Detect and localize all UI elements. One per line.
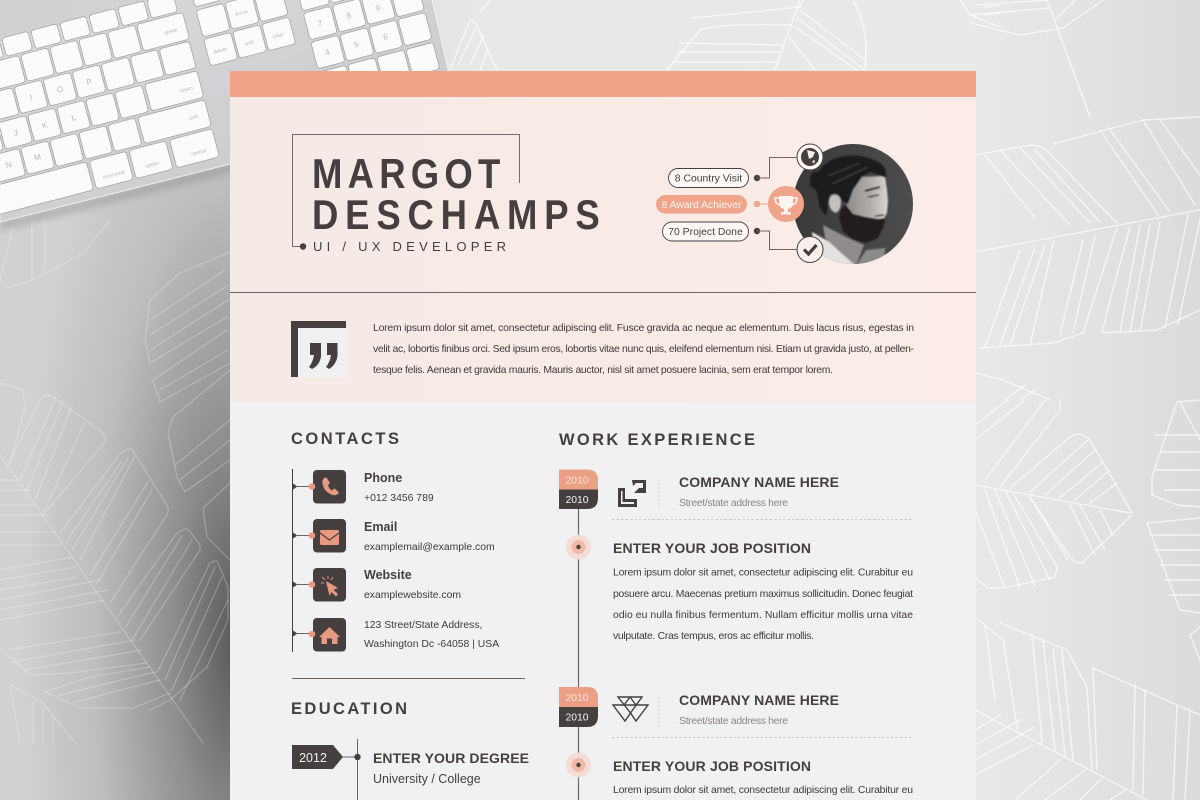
brow and eye [865, 187, 880, 191]
background: right leaf pattern [970, 0, 1200, 800]
timeline node 2 [566, 752, 591, 778]
year tags: job 1: 2010 [565, 476, 589, 486]
icon: company logo triangles [613, 697, 648, 721]
heading: contacts: CONTACTS [291, 430, 399, 448]
keyboard keys: delete [164, 27, 179, 37]
stat: 8 award achiever: 8 Award Achiever [661, 200, 742, 211]
job position 1 [613, 540, 913, 642]
title frame [292, 134, 520, 250]
keyboard keys: 8 [346, 11, 353, 21]
year tags: job 2 [559, 687, 598, 727]
keyboard keys: page [273, 31, 285, 40]
contact: address: 123 Street/State Address, [364, 620, 482, 631]
summary paragraph: velit ac, lobortis finibus orci. Sed ipsum eros, lobortis vitae nunc quis, eleifend elementum nisi. Etiam ut gravida justo, at pellen- [373, 344, 914, 355]
stat: 70 project done: 70 Project Done [668, 227, 743, 238]
contact: address [309, 618, 499, 652]
icon: trophy [768, 186, 804, 222]
keyboard keys: control [191, 148, 207, 158]
summary paragraph: Lorem ipsum dolor sit amet, consectetur adipiscing elit. Fusce gravida ac neque ac elementum. Duis lacus risus, egestas in [373, 323, 914, 334]
company block 1: Street/state address here [679, 498, 788, 509]
job position 1: posuere arcu. Maecenas pretium maximus sollicitudin. Donec feugiat [613, 589, 913, 600]
keyboard keys: return [179, 85, 194, 95]
summary paragraph [373, 323, 914, 376]
job position 1: Lorem ipsum dolor sit amet, consectetur adipiscing elit. Curabitur eu [613, 568, 913, 578]
company block 2: COMPANY NAME HERE [679, 692, 839, 708]
keyboard keys: 4 [324, 47, 331, 57]
company block 2 [612, 692, 913, 738]
resume paper [230, 71, 976, 800]
year tags: job 2: 2010 [565, 712, 589, 724]
keyboard keys: L [71, 113, 78, 123]
keyboard keys: end [245, 39, 255, 47]
paper lower body [230, 403, 976, 800]
contact: website: examplewebsite.com [364, 590, 461, 601]
contact: address: Washington Dc -64058 | USA [364, 639, 499, 650]
title: name: MARGOT [312, 152, 500, 198]
company block 2: Street/state address here [679, 716, 788, 727]
education entry [292, 739, 529, 800]
contact: website [309, 568, 461, 602]
icon: quote mark [291, 321, 346, 377]
keyboard keys: N [5, 160, 13, 170]
education entry: 2012 [299, 751, 327, 765]
contact: email [309, 519, 495, 553]
neck [823, 225, 864, 266]
stat: 8 country visit: 8 Country Visit [675, 174, 742, 184]
keyboard keys [0, 0, 447, 235]
title: name [312, 152, 600, 239]
background: left leaf pattern [0, 220, 230, 743]
contacts timeline [292, 469, 310, 652]
keyboard keys: command [102, 169, 125, 181]
year tags: job 1 [559, 470, 598, 509]
contact: email: examplemail@example.com [364, 542, 495, 553]
year tags: job 2: 2010 [565, 693, 589, 704]
timeline node 1 [566, 534, 591, 560]
icon: check [797, 236, 823, 262]
keyboard keys: M [33, 152, 42, 163]
paper header panel [230, 97, 976, 403]
face [846, 176, 888, 225]
orange top bar [230, 71, 976, 97]
stat: 8 award achiever [656, 195, 772, 214]
icon: globe [797, 144, 823, 170]
job position 1: ENTER YOUR JOB POSITION [613, 540, 811, 556]
work timeline [578, 509, 580, 800]
keyboard keys: 7 [317, 18, 324, 28]
year tags: job 1: 2010 [565, 495, 589, 506]
job position 1: odio eu nulla finibus fermentum. Nullam efficitur mollis urna vitae [613, 610, 913, 621]
hair [810, 155, 886, 216]
keyboard keys: O [56, 84, 64, 95]
keyboard keys: P [85, 77, 93, 87]
summary paragraph: tesque felis. Aenean et gravida mauris. Mauris auctor, nisl sit amet posuere lacinia, sem erat tempor lorem. [373, 365, 833, 376]
keyboard keys: 6 [382, 32, 389, 42]
job position 2 [613, 758, 913, 796]
stat: 8 country visit [668, 158, 797, 188]
job position 2: ENTER YOUR JOB POSITION [613, 758, 811, 774]
contact: phone: +012 3456 789 [364, 493, 434, 504]
education entry: University / College [373, 772, 481, 786]
company block 1 [612, 474, 913, 520]
job position 1: vulputate. Cras tempus, eros ac efficitur mollis. [613, 631, 814, 642]
keyboard keys: option [145, 160, 160, 170]
portrait photo [795, 144, 913, 264]
contact: website: Website [364, 568, 412, 582]
background: top leaf pattern [450, 0, 1000, 72]
ear [829, 195, 841, 213]
contact: email: Email [364, 520, 397, 534]
heading: education: EDUCATION [291, 700, 407, 718]
keyboard keys: K [41, 120, 49, 131]
shirt [812, 232, 856, 266]
title: name: DESCHAMPS [312, 193, 600, 239]
keyboard keys: shift [189, 114, 200, 122]
keyboard [0, 0, 470, 235]
keyboard keys: I [29, 92, 33, 102]
keyboard keys: delete [213, 46, 228, 56]
stat: 70 project done [662, 222, 797, 250]
icon: company logo squares [618, 480, 646, 507]
keyboard keys: 5 [353, 40, 360, 50]
subtitle: UI / UX DEVELOPER [313, 239, 506, 254]
contact: phone: Phone [364, 471, 402, 485]
education entry: ENTER YOUR DEGREE [373, 750, 529, 766]
beard [839, 205, 885, 243]
heading: work experience: WORK EXPERIENCE [559, 431, 755, 449]
company block 1: COMPANY NAME HERE [679, 474, 839, 490]
job position 2: Lorem ipsum dolor sit amet, consectetur adipiscing elit. Curabitur eu [613, 785, 913, 796]
keyboard keys: home [235, 9, 249, 18]
keyboard keys: J [13, 128, 19, 138]
contact: phone [309, 470, 434, 504]
keyboard body [0, 0, 455, 222]
keyboard shadow [0, 104, 470, 230]
keyboard keys: 9 [375, 3, 382, 13]
